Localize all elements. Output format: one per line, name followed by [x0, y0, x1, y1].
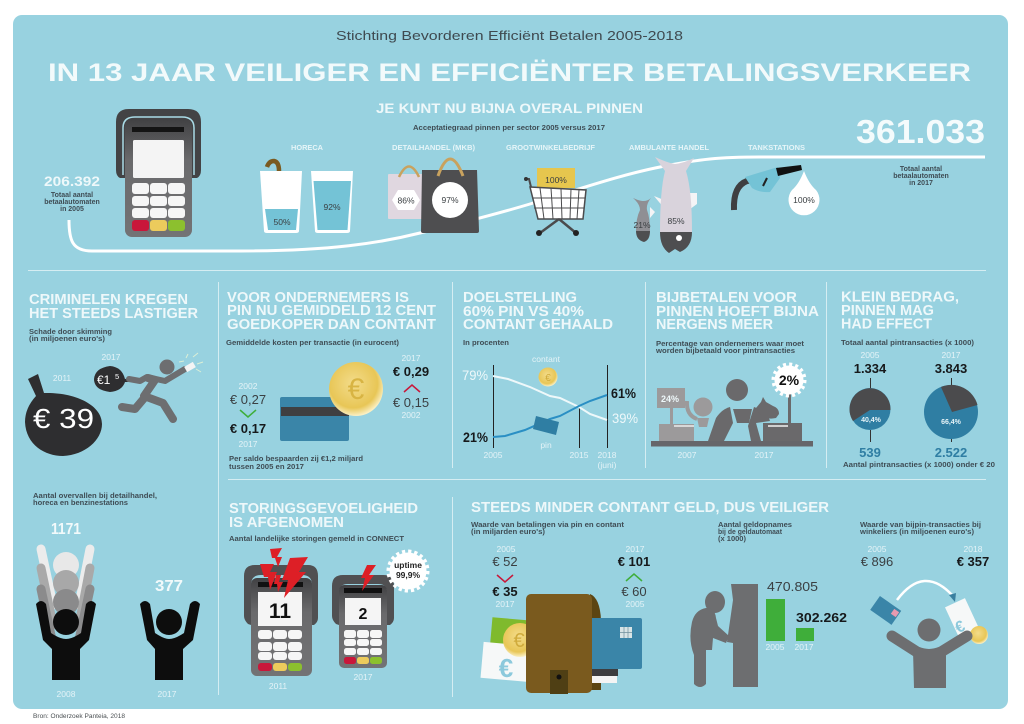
terminal 2011: 2011	[269, 681, 287, 691]
icon: wallet with money and card: €	[499, 653, 513, 683]
icon: small money bag: 5	[115, 372, 119, 381]
sector: horeca: HORECA	[291, 143, 323, 152]
icon: wallet with money and card: €	[513, 630, 525, 652]
line chart: €	[545, 373, 551, 384]
heading: DOELSTELLING	[463, 290, 577, 306]
line chart: 2018	[598, 450, 617, 460]
stat 2017: in 2017	[909, 180, 933, 187]
cash cost values: € 0,29	[393, 364, 429, 379]
line chart: 79%	[462, 367, 488, 383]
heading: STORINGSGEVOELIGHEID	[229, 501, 418, 517]
sector: tankstations: TANKSTATIONS	[748, 143, 805, 152]
icon: lightning bolts	[260, 548, 308, 598]
icon: big money bag	[25, 373, 102, 456]
subtitle: geldopnames	[718, 522, 792, 543]
robbery figure 2017	[140, 578, 200, 699]
pin values: 2005	[626, 599, 645, 609]
pie 2017: 2017	[942, 350, 961, 360]
icon: small money bag: 2017	[102, 352, 121, 362]
subtitle	[33, 493, 157, 507]
pie 2005	[850, 350, 891, 460]
subtitle: waarde betalingen: Waarde van betalingen via pin en contant	[471, 522, 625, 529]
heading: KLEIN BEDRAG,	[841, 290, 959, 306]
bar chart: geldopnames: 2005	[766, 642, 785, 652]
subtitle: geldopnames: Aantal geldopnames	[718, 522, 792, 529]
contant values: € 52	[492, 554, 518, 569]
heading: VOOR ONDERNEMERS IS	[227, 290, 409, 306]
subtitle: Percentage van ondernemers waar moet	[656, 341, 805, 348]
heading: PINNEN HOEFT BIJNA	[656, 304, 820, 320]
note	[229, 456, 363, 471]
pie 2017: 3.843	[935, 361, 967, 376]
note: Per saldo bespaarden zij €1,2 miljard	[229, 456, 363, 463]
panel: overvallen	[33, 493, 200, 699]
terminal 2011: 11	[269, 600, 291, 623]
heading: HET STEEDS LASTIGER	[29, 306, 199, 322]
contant values: 2005	[497, 544, 516, 554]
subtitle: geldopnames: (x 1000)	[718, 536, 746, 543]
sector: tankstations: 100%	[793, 195, 815, 205]
robbery figure 2017: 2017	[158, 689, 177, 699]
badge: uptime: 99,9%	[396, 570, 420, 580]
subtitle: Totaal aantal pintransacties (x 1000)	[841, 340, 974, 347]
panel: criminelen skimming	[25, 292, 203, 456]
subtitle: Aantal landelijke storingen gemeld in CONNECT	[229, 536, 405, 543]
bar chart: geldopnames	[766, 579, 847, 652]
pin cost values: € 0,27	[230, 392, 266, 407]
main title: IN 13 JAAR VEILIGER EN EFFICIËNTER BETALINGSVERKEER	[48, 59, 971, 87]
stat 2005: Totaal aantal	[51, 192, 93, 199]
line chart: (juni)	[598, 460, 617, 470]
sector: horeca: 92%	[323, 202, 341, 212]
robbery figure 2008: 1171	[51, 521, 81, 538]
bijpin values: € 357	[957, 554, 989, 569]
subtitle: horeca en benzinestations	[33, 500, 128, 507]
bar chart: geldopnames: 302.262	[796, 610, 847, 625]
illustration: shop counters: 2017	[755, 450, 774, 460]
panel: minder contant geld	[471, 500, 989, 694]
icon: small money bag	[94, 352, 131, 392]
bar chart: geldopnames: 470.805	[767, 579, 818, 594]
terminal 2017: 2	[359, 606, 368, 623]
icon: small money bag: €1	[97, 373, 111, 387]
subtitle: (in miljoenen euro's)	[29, 336, 105, 343]
pie 2005: 539	[859, 445, 881, 460]
caption: Aantal pintransacties (x 1000) onder € 20	[843, 462, 995, 469]
heading	[463, 290, 613, 333]
sector: detailhandel: 97%	[441, 195, 459, 205]
subtitle	[655, 341, 805, 355]
robbery figure 2008	[36, 521, 96, 699]
heading	[229, 501, 418, 531]
sector: grootwinkelbedrijf: GROOTWINKELBEDRIJF	[506, 143, 596, 152]
sector: ambulante handel: AMBULANTE HANDEL	[629, 143, 710, 152]
icon: payment terminal	[116, 109, 201, 237]
subtitle	[29, 329, 112, 343]
subtitle: Aantal overvallen bij detailhandel,	[33, 493, 157, 500]
pie 2005: 40,4%	[861, 417, 882, 424]
subtitle: Stichting Bevorderen Efficiënt Betalen 2005-2018	[336, 28, 683, 43]
pie 2017: 66,4%	[941, 419, 962, 426]
panel: storingen	[229, 501, 428, 691]
cash cost values: € 0,15	[393, 395, 429, 410]
contant values: € 35	[492, 584, 518, 599]
bijpin values	[861, 544, 989, 569]
cash cost values: 2017	[402, 353, 421, 363]
bijpin values: € 896	[861, 554, 893, 569]
line chart: 61%	[611, 385, 636, 401]
subtitle: waarde betalingen	[471, 522, 625, 536]
heading: BIJBETALEN VOOR	[656, 290, 798, 306]
subtitle: bijpin: winkeliers (in miljoenen euro's)	[859, 529, 974, 536]
heading: HAD EFFECT	[841, 316, 932, 332]
subtitle: In procenten	[463, 340, 509, 347]
icon: big money bag: 2011	[53, 373, 71, 383]
line chart: 2015	[570, 450, 589, 460]
pie 2005: 2005	[861, 350, 880, 360]
pin values: € 101	[618, 554, 650, 569]
cash cost values: 2002	[402, 410, 421, 420]
sector: ambulante handel: 85%	[667, 216, 685, 226]
pin cost values: 2002	[239, 381, 258, 391]
line chart: 39%	[612, 410, 638, 426]
heading: PINNEN MAG	[841, 303, 934, 319]
icon: card and coin	[280, 362, 383, 441]
stat 2005	[44, 174, 100, 213]
bar chart: geldopnames: 2017	[795, 642, 814, 652]
badge: uptime: uptime	[394, 560, 422, 570]
heading	[29, 292, 199, 322]
robbery figure 2017: 377	[155, 578, 183, 595]
line chart: pin	[540, 440, 552, 450]
subtitle: bijpin: Waarde van bijpin-transacties bij	[860, 522, 981, 529]
stat 2017: Totaal aantal	[900, 166, 942, 173]
line chart: 2005	[484, 450, 503, 460]
icon: person with card and cash: €	[953, 618, 968, 637]
heading: GOEDKOPER DAN CONTANT	[227, 317, 436, 333]
pin cost values: € 0,17	[230, 421, 266, 436]
subtitle: bijpin	[859, 522, 981, 536]
sector: horeca: 50%	[273, 217, 291, 227]
subtitle: waarde betalingen: (in miljarden euro's)	[471, 529, 545, 536]
contant values: 2017	[496, 599, 515, 609]
pin values	[618, 544, 650, 609]
heading: STEEDS MINDER CONTANT GELD, DUS VEILIGER	[471, 500, 830, 516]
icon: card and coin: €	[348, 373, 365, 406]
terminal 2011	[244, 565, 318, 691]
sector: detailhandel	[388, 143, 479, 233]
line chart: contant	[532, 354, 561, 364]
stat 2005: betaalautomaten	[44, 199, 100, 206]
cash cost values	[393, 353, 429, 420]
heading: 60% PIN VS 40%	[463, 304, 584, 320]
terminal 2017	[332, 565, 394, 682]
sector: grootwinkelbedrijf: 100%	[545, 175, 567, 185]
sector: horeca	[260, 143, 353, 233]
stat 2017	[856, 113, 985, 187]
stat 2005: in 2005	[60, 206, 84, 213]
illustration: shop counters: 2007	[678, 450, 697, 460]
sector: detailhandel: 86%	[397, 196, 415, 206]
icon: wallet with money and card	[481, 594, 642, 694]
pin values: 2017	[626, 544, 645, 554]
heading: CONTANT GEHAALD	[463, 317, 613, 333]
pie 2017: 2.522	[935, 445, 967, 460]
subtitle: geldopnames: bij de geldautomaat	[718, 529, 783, 536]
heading: CRIMINELEN KREGEN	[29, 292, 188, 308]
icon: runner with card	[122, 353, 203, 419]
subtitle: worden bijbetaald voor pintransacties	[655, 348, 795, 355]
line chart	[462, 354, 638, 470]
section subtitle: Acceptatiegraad pinnen per sector 2005 versus 2017	[413, 125, 605, 132]
panel: klein bedrag	[841, 290, 995, 469]
icon: big money bag: € 39	[33, 403, 94, 434]
illustration: shop counters: 24%	[661, 394, 679, 404]
sector: ambulante handel	[629, 143, 710, 253]
pie 2005: 1.334	[854, 361, 887, 376]
subtitle: Schade door skimming	[29, 329, 112, 336]
terminal 2017: 2017	[354, 672, 373, 682]
panel: ondernemers kosten	[226, 290, 436, 471]
illustration: shop counters	[651, 364, 813, 460]
robbery figure 2008: 2008	[57, 689, 76, 699]
subtitle: Gemiddelde kosten per transactie (in eurocent)	[226, 340, 399, 347]
pie 2017	[924, 350, 978, 460]
section heading: JE KUNT NU BIJNA OVERAL PINNEN	[376, 100, 643, 116]
bijpin values: 2005	[868, 544, 887, 554]
panel: bijbetalen	[651, 290, 820, 460]
heading: IS AFGENOMEN	[229, 515, 344, 531]
pin cost values	[230, 381, 266, 449]
header	[48, 28, 971, 87]
stat 2017: betaalautomaten	[893, 173, 949, 180]
heading	[227, 290, 436, 333]
heading: NERGENS MEER	[656, 317, 774, 333]
stat 2017: 361.033	[856, 113, 985, 150]
badge: uptime	[388, 552, 428, 590]
sector: tankstations	[734, 143, 820, 215]
panel: doelstelling	[462, 290, 638, 470]
icon: person at ATM	[690, 584, 758, 687]
section: acceptatie pinnen	[44, 100, 985, 253]
icon: person with card and cash	[870, 581, 988, 688]
pin values: € 60	[621, 584, 647, 599]
heading	[841, 290, 959, 332]
sector: detailhandel: DETAILHANDEL (MKB)	[392, 143, 476, 152]
growth curve	[69, 157, 985, 251]
illustration: shop counters: 2%	[779, 372, 800, 388]
heading	[656, 290, 820, 333]
heading: PIN NU GEMIDDELD 12 CENT	[227, 303, 436, 319]
source note: Bron: Onderzoek Panteia, 2018	[33, 713, 125, 720]
sector: ambulante handel: 21%	[633, 220, 651, 230]
note: tussen 2005 en 2017	[229, 464, 304, 471]
stat 2005: 206.392	[44, 174, 100, 189]
bijpin values: 2018	[964, 544, 983, 554]
line chart: 21%	[463, 429, 488, 445]
sector: grootwinkelbedrijf	[506, 143, 596, 236]
pin cost values: 2017	[239, 439, 258, 449]
contant values	[492, 544, 518, 609]
